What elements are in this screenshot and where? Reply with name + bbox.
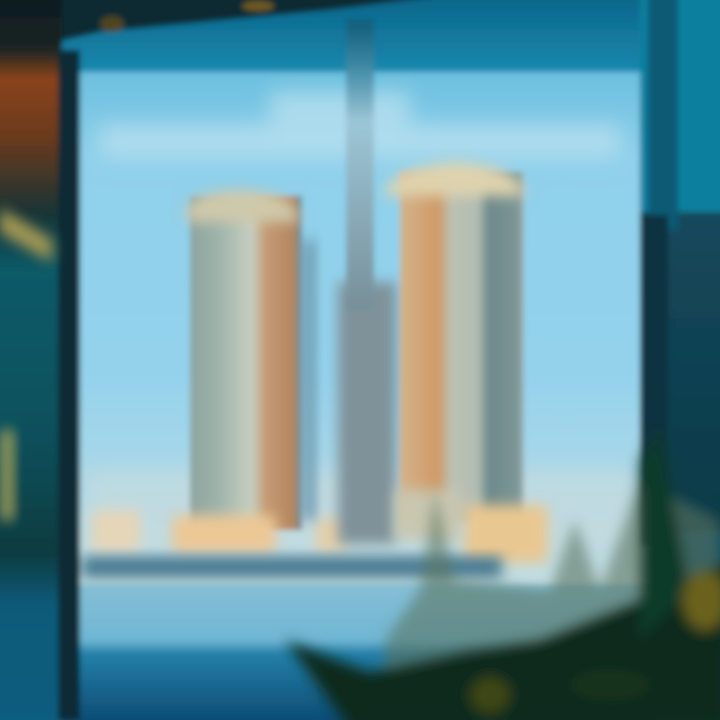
- top band: window frame header: [0, 0, 720, 72]
- shoreline: dark band: [82, 556, 502, 578]
- shade beside left tower: [302, 240, 316, 520]
- right tower: [385, 162, 548, 563]
- background: sky: [60, 50, 660, 590]
- clouds: bright band in the sky: [100, 92, 620, 157]
- central column: [346, 20, 374, 310]
- left tower: [172, 190, 302, 553]
- right pillar: window frame: [640, 0, 720, 545]
- left pillar: window frame: [0, 0, 80, 720]
- horizon haze: [85, 470, 640, 550]
- middle tower: [338, 282, 396, 544]
- distant shoreline buildings: [92, 510, 346, 552]
- plants: foliage in the lower right: [285, 430, 720, 720]
- water: [60, 584, 660, 720]
